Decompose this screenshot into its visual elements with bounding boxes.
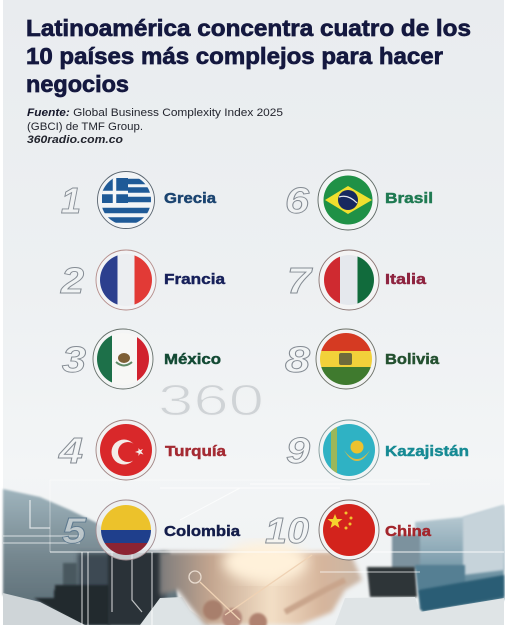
source text: (GBCI) de TMF Group. [27,121,143,133]
rank number 6: 6 [285,180,310,221]
item 6: Brasil [285,170,433,230]
right city silhouette [335,505,504,625]
icon: flag of Greece [98,172,154,228]
icon: flag of Turkey [96,420,156,480]
label: México: México [164,351,221,368]
rank number 2: 2 [60,260,84,301]
item 10: China [265,500,432,560]
title: negocios [26,71,129,97]
title: Latinoamérica concentra cuatro de los [26,15,471,41]
label: Turquía: Turquía [165,443,227,460]
background illustration: city skyline and handshake [3,480,504,625]
item 9: Kazajistán [286,420,469,480]
label: Bolivia: Bolivia [385,351,440,368]
item 7: Italia [287,250,427,310]
rank number 5: 5 [62,510,87,551]
watermark: 360: 360 [158,376,264,425]
source text: 360radio.com.co [27,134,123,146]
circuit lines [3,480,504,625]
rank number 10: 10 [265,510,309,551]
title [26,15,471,97]
label: Italia: Italia [385,271,427,288]
item 4: Turquía [58,420,227,480]
source text: Fuente: Global Business Complexity Index 2025 [27,107,283,119]
label: Grecia: Grecia [164,190,217,207]
icon: flag of Colombia [96,500,156,560]
rank number 3: 3 [62,339,86,380]
rank number 9: 9 [286,430,310,471]
item 3: México [62,329,221,389]
label: Kazajistán: Kazajistán [385,443,469,460]
handshake [160,542,362,625]
item 1: Grecia [61,172,217,228]
rank number 7: 7 [287,260,313,301]
icon: flag of China [319,500,379,560]
source text [27,107,283,146]
icon: flag of France [96,250,156,310]
icon: flag of Mexico [93,329,153,389]
item 8: Bolivia [285,329,440,389]
label: Francia: Francia [164,271,226,288]
rank number 8: 8 [285,339,310,380]
item 2: Francia [60,250,226,310]
item 5: Colombia [62,500,241,560]
icon: flag of Brazil [318,170,378,230]
title: 10 países más complejos para hacer [26,43,443,69]
icon: flag of Kazakhstan [319,420,379,480]
left city silhouette [3,489,210,625]
label: China: China [385,523,432,540]
label: Colombia: Colombia [164,523,241,540]
rank number 4: 4 [58,430,83,471]
rank number 1: 1 [61,180,81,221]
label: Brasil: Brasil [385,190,433,207]
icon: flag of Bolivia [316,329,376,389]
icon: flag of Italy [319,250,379,310]
